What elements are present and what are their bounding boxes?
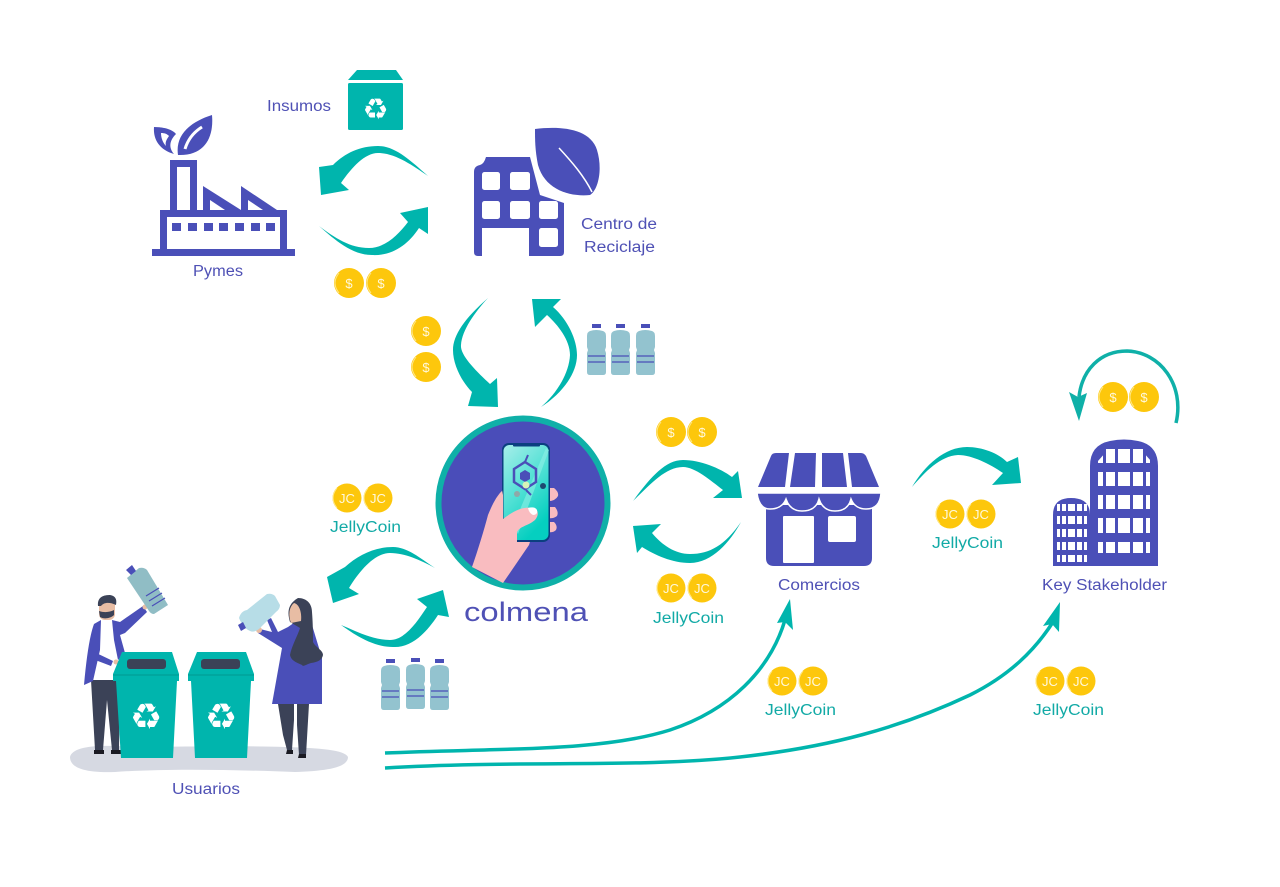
icon: recycling box bbox=[348, 70, 403, 130]
coins: dollars Key Stakeholder: $ bbox=[1140, 390, 1148, 405]
icon: bottles Centro bbox=[587, 324, 655, 375]
arrow: Pymes to Centro bbox=[319, 207, 428, 255]
coins: dollars Pymes: $ bbox=[345, 276, 353, 291]
coins: dollars Pymes bbox=[334, 268, 396, 298]
illustration: users recycling: ♻ bbox=[205, 697, 237, 738]
arrow: Colmena to Comercios bbox=[633, 460, 742, 501]
coins: JC Key Stakeholder bbox=[936, 500, 996, 528]
label: Insumos: Insumos bbox=[267, 98, 331, 115]
coins: dollars Comercios bbox=[656, 417, 717, 447]
label: JellyCoin: JellyCoin bbox=[1033, 702, 1104, 719]
coins: JC Usuarios: JC bbox=[339, 491, 355, 506]
illustration: users recycling: ♻ bbox=[130, 697, 162, 738]
illustration: users recycling bbox=[70, 565, 348, 772]
arrow: Comercios to Key Stakeholder bbox=[912, 447, 1021, 487]
coins: JC Comercios: JC bbox=[663, 581, 679, 596]
coins: JC Usuarios: JC bbox=[370, 491, 386, 506]
label: Usuarios: Usuarios bbox=[172, 781, 240, 798]
coins: dollars Comercios: $ bbox=[698, 425, 706, 440]
label: JellyCoin: JellyCoin bbox=[932, 535, 1003, 552]
arrow: Centro to Pymes bbox=[319, 146, 428, 195]
coins: JC Comercios bbox=[656, 574, 716, 602]
coins: JC Key Stakeholder: JC bbox=[942, 507, 958, 522]
label: Key Stakeholder: Key Stakeholder bbox=[1042, 577, 1167, 594]
icon: recycling box: ♻ bbox=[362, 92, 388, 126]
coins: dollars Centro: $ bbox=[422, 360, 430, 375]
arrow: Centro to Colmena bbox=[453, 298, 498, 407]
label: Centro de Reciclaje: Centro de bbox=[581, 216, 657, 233]
icon: recycling centre building bbox=[474, 128, 600, 256]
arrow: Comercios to Colmena bbox=[633, 522, 741, 563]
label: JellyCoin: JellyCoin bbox=[653, 610, 724, 627]
coins: dollars Centro bbox=[411, 316, 441, 382]
coins: dollars Centro: $ bbox=[422, 324, 430, 339]
logo: colmena circle with phone bbox=[438, 418, 608, 588]
coins: JC Key Stakeholder: JC bbox=[973, 507, 989, 522]
label: Centro de Reciclaje: Reciclaje bbox=[584, 239, 655, 256]
coins: JC curve two: JC bbox=[1073, 674, 1089, 689]
coins: JC curve two bbox=[1036, 666, 1096, 696]
coins: JC curve one bbox=[768, 666, 828, 696]
arrow: Colmena to Centro bbox=[532, 299, 577, 407]
coins: JC curve one: JC bbox=[774, 674, 790, 689]
label: JellyCoin: JellyCoin bbox=[330, 519, 401, 536]
coins: dollars Key Stakeholder bbox=[1098, 382, 1159, 412]
coins: dollars Comercios: $ bbox=[667, 425, 675, 440]
arrow: Usuarios to Key Stakeholder bbox=[385, 602, 1060, 768]
coins: dollars Key Stakeholder: $ bbox=[1109, 390, 1117, 405]
logo text: colmena: colmena bbox=[464, 597, 589, 627]
coins: JC curve one: JC bbox=[805, 674, 821, 689]
arrow: Usuarios to Colmena bbox=[341, 590, 449, 647]
label: Comercios: Comercios bbox=[778, 577, 860, 594]
arrow: Usuarios to Comercios bbox=[385, 599, 793, 753]
label: Pymes: Pymes bbox=[193, 263, 243, 280]
coins: JC Comercios: JC bbox=[694, 581, 710, 596]
arrow: loop Key Stakeholder bbox=[1069, 351, 1178, 423]
icon: store Comercios bbox=[757, 453, 881, 566]
label: JellyCoin: JellyCoin bbox=[765, 702, 836, 719]
label: Centro de Reciclaje bbox=[581, 216, 657, 256]
coins: JC curve two: JC bbox=[1042, 674, 1058, 689]
icon: factory Pymes bbox=[152, 115, 295, 256]
icon: Key Stakeholder buildings bbox=[1053, 440, 1158, 566]
icon: bottles Usuarios bbox=[381, 658, 449, 710]
coins: JC Usuarios bbox=[332, 484, 392, 512]
coins: dollars Pymes: $ bbox=[377, 276, 385, 291]
arrow: Colmena to Usuarios bbox=[327, 547, 435, 603]
